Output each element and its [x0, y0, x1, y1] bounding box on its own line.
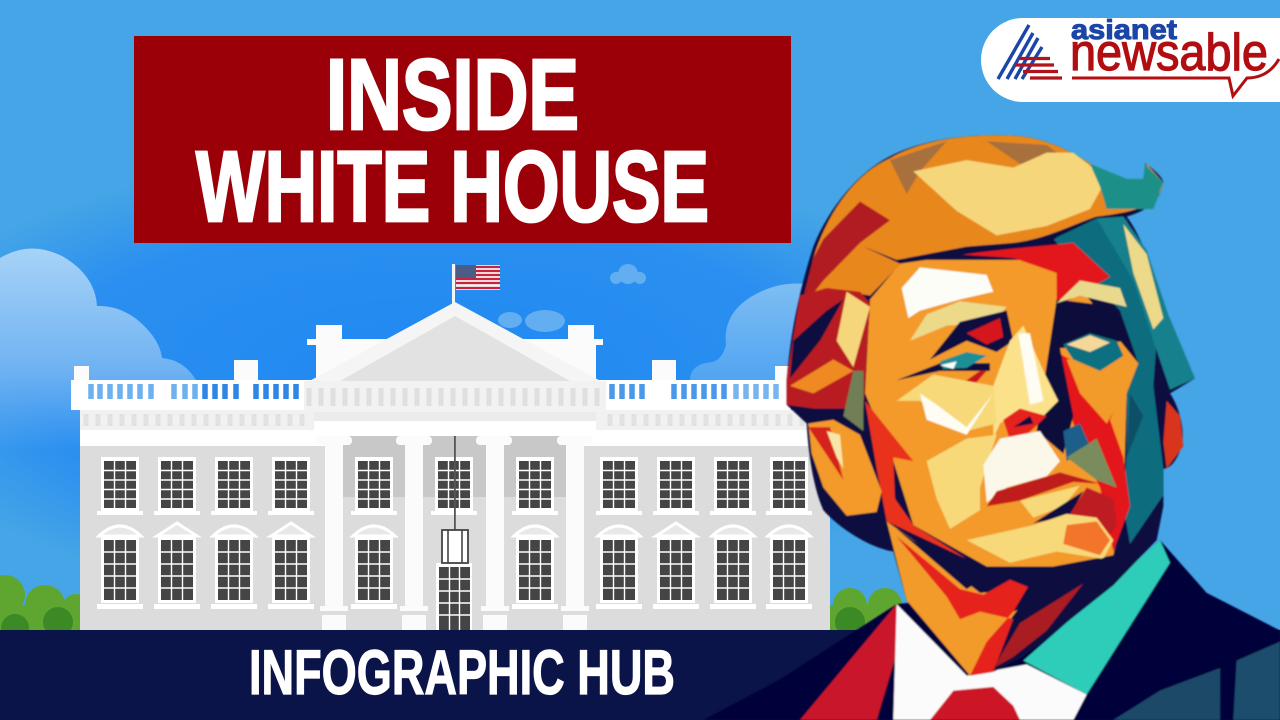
left brow — [910, 301, 1013, 360]
footer bar — [0, 630, 1280, 720]
side hair — [787, 288, 870, 408]
right side of head — [1053, 218, 1163, 544]
cheeks — [897, 375, 1060, 529]
portrait — [703, 135, 1280, 720]
head silhouette — [787, 135, 1195, 676]
face shadows — [865, 243, 1138, 568]
logo mark — [998, 25, 1062, 79]
pediment — [302, 302, 608, 436]
bushes — [0, 575, 902, 642]
main wall — [80, 445, 830, 630]
hair base — [790, 135, 1163, 375]
logo — [981, 14, 1280, 102]
face base — [865, 260, 1138, 567]
right ear — [1163, 401, 1183, 469]
left eye — [897, 352, 990, 393]
balustrade — [71, 380, 791, 410]
suit and shirt — [703, 540, 1280, 720]
neck — [887, 521, 1083, 676]
clouds — [0, 248, 815, 450]
logo wordmark top: asianet — [1071, 14, 1177, 45]
left ear — [808, 420, 882, 516]
right hair — [1097, 217, 1195, 390]
forehead highlight — [902, 267, 993, 318]
title banner — [134, 36, 791, 243]
roof chimneys and upper block — [74, 325, 790, 390]
jaw shadow — [897, 529, 1127, 612]
nose — [993, 326, 1058, 440]
entrance door and lantern — [436, 436, 472, 630]
mouth and chin — [967, 472, 1117, 563]
hair — [787, 135, 1163, 431]
white house — [71, 264, 830, 630]
flag — [452, 264, 500, 304]
upper windows — [97, 457, 812, 515]
title line 2: WHITE HOUSE — [196, 131, 709, 243]
title line 1: INSIDE — [326, 39, 579, 151]
lower windows — [97, 523, 812, 609]
logo speech underline — [1072, 59, 1279, 96]
columns — [316, 436, 593, 630]
footer label: INFOGRAPHIC HUB — [249, 638, 675, 708]
portico shade — [343, 436, 566, 497]
frieze band — [80, 410, 830, 446]
right eye — [1057, 281, 1127, 371]
